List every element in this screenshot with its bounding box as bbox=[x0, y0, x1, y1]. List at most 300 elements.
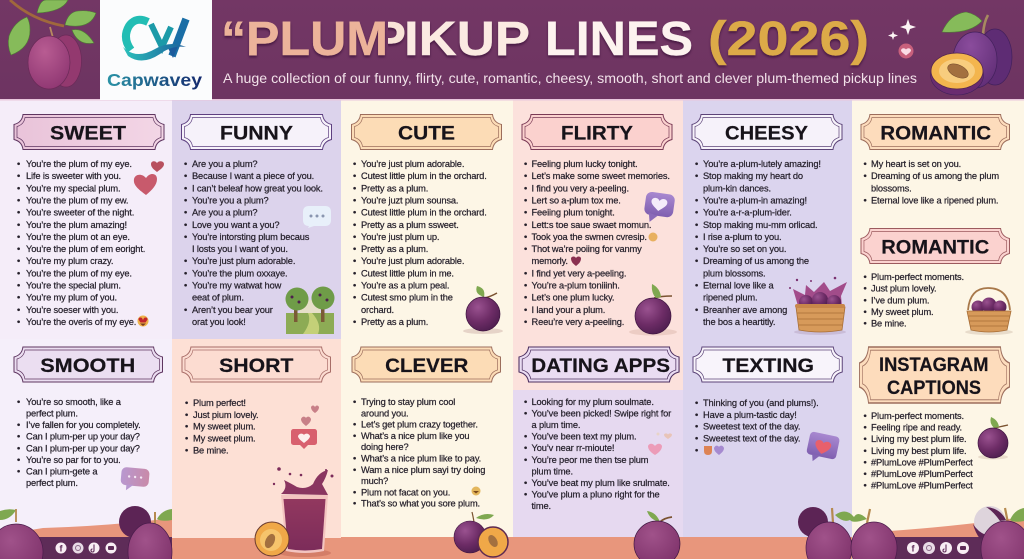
list: flirty lines: • bbox=[524, 268, 527, 278]
list: funny lines: orat you look! bbox=[192, 317, 246, 327]
list: texting lines: • bbox=[695, 422, 698, 432]
list: cheesy lines: I rise a-plum to you. bbox=[703, 232, 782, 242]
illustration: orchard trees bbox=[286, 286, 334, 334]
list: dating apps lines: You’ve been picked! Swipe right for bbox=[532, 409, 671, 419]
list: sweet lines: Life is sweeter with you. bbox=[26, 171, 121, 181]
list: sweet lines: • bbox=[17, 171, 20, 181]
list: funny lines: • bbox=[184, 305, 187, 315]
list: dating apps lines: You’v near rr-mioute! bbox=[532, 443, 614, 453]
heading: romantic second bbox=[861, 228, 1010, 264]
logo: capwavey bbox=[100, 0, 212, 100]
list: sweet lines: You’re the plum of my eye. bbox=[26, 268, 132, 278]
list: sweet lines: You’re my special plum. bbox=[26, 183, 120, 193]
list: cheesy lines: the bos a heartitly. bbox=[703, 317, 775, 327]
list: cute lines: • bbox=[353, 159, 356, 169]
list: romantic second lines: I’ve dum plum. bbox=[871, 295, 929, 305]
list: cheesy lines: • bbox=[695, 232, 698, 242]
list: flirty lines: Feeling plum lucky tonight. bbox=[532, 159, 638, 169]
list: short lines: Be mine. bbox=[193, 445, 228, 455]
heading: romantic second: ROMANTIC bbox=[881, 237, 990, 259]
list: flirty lines: • bbox=[524, 305, 527, 315]
list: funny lines: You’re the plum oxxaye. bbox=[192, 268, 287, 278]
list: flirty lines: • bbox=[524, 159, 527, 169]
heading: cheesy bbox=[692, 114, 842, 150]
list: smooth lines: • bbox=[17, 397, 20, 407]
list: smooth lines: • bbox=[17, 466, 20, 476]
list: flirty lines: • bbox=[524, 244, 527, 254]
illustration: plum with half bbox=[930, 12, 1012, 95]
list: sweet lines: You’re the special plum. bbox=[26, 280, 121, 290]
list: sweet lines: You’re my plum crazy. bbox=[26, 256, 113, 266]
heading: sweet: SWEET bbox=[50, 124, 126, 144]
list: funny lines: • bbox=[184, 256, 187, 266]
list: dating apps lines: plum time. bbox=[532, 466, 573, 476]
list: funny lines: You’re my watwat how bbox=[192, 280, 282, 290]
list: clever lines: • bbox=[353, 420, 356, 430]
list: sweet lines: • bbox=[17, 244, 20, 254]
list: smooth lines: • bbox=[17, 455, 20, 465]
panel: short bbox=[172, 339, 341, 559]
list: instagram captions lines: #PlumLove #PlumPerfect bbox=[871, 457, 973, 467]
icon: plum bbox=[978, 417, 1008, 460]
list: cute lines: • bbox=[353, 171, 356, 181]
illustration: plum basket bbox=[965, 288, 1013, 335]
list: funny lines: You’re intorsting plum becaus bbox=[192, 232, 310, 242]
heading: cheesy: CHEESY bbox=[725, 124, 808, 144]
list: dating apps lines: You’re peor me then tse plum bbox=[532, 455, 649, 465]
header band bbox=[0, 0, 1024, 100]
list: cheesy lines: • bbox=[695, 220, 698, 230]
icon: heart message bubble bbox=[805, 431, 840, 466]
title: “PLUM bbox=[221, 13, 388, 66]
list: short lines: • bbox=[185, 434, 188, 444]
list: smooth lines: Can I pium-gete a bbox=[26, 466, 98, 476]
list: clever lines: • bbox=[353, 465, 356, 475]
list: cute lines: Pretty as a plum. bbox=[361, 183, 428, 193]
list: cheesy lines: • bbox=[695, 208, 698, 218]
heading: cute: CUTE bbox=[398, 124, 455, 144]
list: funny lines: • bbox=[184, 220, 187, 230]
heading: instagram captions bbox=[860, 347, 1010, 403]
list: dating apps lines: • bbox=[524, 489, 527, 499]
list: cute lines: Cutest little plum in the orchard. bbox=[361, 171, 487, 181]
list: funny lines: You’re just plum adorable. bbox=[192, 256, 295, 266]
list: flirty lines: Lert so a-plum tox me. bbox=[532, 196, 621, 206]
list: cheesy lines: • bbox=[695, 196, 698, 206]
list: dating apps lines: time. bbox=[532, 501, 551, 511]
list: instagram captions lines: • bbox=[864, 469, 867, 479]
list: clever lines: Let’s get plum crazy together. bbox=[361, 420, 478, 430]
title: IKUP bbox=[404, 13, 530, 66]
list: sweet lines: • bbox=[17, 183, 20, 193]
list: clever lines: What’s a nice plum like to pay. bbox=[361, 454, 481, 464]
list: cheesy lines: You’re a-plum-in amazing! bbox=[703, 196, 807, 206]
list: cute lines: Cutest little plum in the orchard. bbox=[361, 208, 487, 218]
list: funny lines: You’re you a plum? bbox=[192, 196, 269, 206]
list: flirty lines: memorly. bbox=[532, 256, 568, 266]
panel: instagram captions bbox=[852, 339, 1024, 559]
list: cute lines: • bbox=[353, 196, 356, 206]
heading: texting: TEXTING bbox=[722, 356, 814, 377]
panel: smooth bbox=[0, 339, 172, 559]
list: cheesy lines: Dreaming of us among the bbox=[703, 256, 809, 266]
list: clever lines: Wam a nice plum sayi try doing bbox=[361, 465, 485, 475]
icon: plum bbox=[634, 511, 680, 559]
list: romantic second lines: • bbox=[864, 272, 867, 282]
list: funny lines: Are you a plum? bbox=[192, 208, 257, 218]
list: cheesy lines: plum-kin dances. bbox=[703, 183, 771, 193]
list: cute lines: • bbox=[353, 208, 356, 218]
list: dating apps lines: You’ve been text my plum. bbox=[532, 432, 636, 442]
list: instagram captions lines: Feeling ripe and ready. bbox=[871, 423, 962, 433]
logo mark: CW wave bbox=[123, 19, 186, 61]
list: cute lines: • bbox=[353, 183, 356, 193]
list: romantic second lines: • bbox=[864, 307, 867, 317]
list: cheesy lines: plum blossoms. bbox=[703, 268, 765, 278]
list: sweet lines: • bbox=[17, 196, 20, 206]
heading: funny: FUNNY bbox=[220, 124, 293, 144]
icon: chat bubble bbox=[303, 206, 331, 228]
list: flirty lines: I find you very a-peeling. bbox=[532, 183, 629, 193]
list: sweet lines: • bbox=[17, 159, 20, 169]
list: flirty lines: • bbox=[524, 196, 527, 206]
list: instagram captions lines: Living my best plum life. bbox=[871, 446, 966, 456]
list: flirty lines: • bbox=[524, 208, 527, 218]
list: sweet lines: You’re the plum of my eye. bbox=[26, 159, 132, 169]
icon: floating hearts bbox=[301, 406, 319, 426]
panel: romantic bbox=[852, 100, 1024, 339]
list: smooth lines: perfect plum. bbox=[26, 409, 78, 419]
list: sweet lines: • bbox=[17, 293, 20, 303]
list: flirty lines: You’re a-plum toniiinh. bbox=[532, 280, 620, 290]
list: sweet lines: You’re my plum of you. bbox=[26, 293, 117, 303]
list: clever lines: That’s so what you sore plum. bbox=[361, 499, 480, 509]
list: cheesy lines: You’re so set on you. bbox=[703, 244, 786, 254]
list: flirty lines: • bbox=[524, 183, 527, 193]
list: instagram captions lines: • bbox=[864, 411, 867, 421]
icon: badge and heart emoji bbox=[704, 446, 724, 455]
icon: small dark heart bbox=[571, 256, 581, 266]
list: sweet lines: You’re soeser with you. bbox=[26, 305, 118, 315]
list: funny lines: I can’t beleaf how great you look. bbox=[192, 183, 323, 193]
social icons right bbox=[907, 542, 969, 554]
heading: clever bbox=[352, 347, 500, 382]
list: sweet lines: • bbox=[17, 232, 20, 242]
list: cheesy lines: Breanher ave among bbox=[703, 305, 787, 315]
list: clever lines: doing here? bbox=[361, 442, 408, 452]
list: cute lines: You’re juzt plum sounsa. bbox=[361, 196, 458, 206]
list: romantic lines: blossoms. bbox=[871, 183, 912, 193]
list: smooth lines: You’re so par for to you. bbox=[26, 455, 121, 465]
list: sweet lines: • bbox=[17, 220, 20, 230]
icon: sparkles and heart bbox=[888, 19, 916, 58]
list: sweet lines: You’re sweeter of the night. bbox=[26, 208, 134, 218]
logo wordmark: Capwavey bbox=[107, 70, 202, 90]
heading: dating apps bbox=[519, 347, 679, 382]
list: funny lines: • bbox=[184, 232, 187, 242]
list: instagram captions lines: #PlumLove #PlumPerfect bbox=[871, 469, 973, 479]
list: cute lines: You’re just plum up. bbox=[361, 232, 439, 242]
illustration: whole and half plum bbox=[454, 512, 508, 557]
list: short lines: • bbox=[185, 398, 188, 408]
list: smooth lines: I’ve fallen for you completely. bbox=[26, 420, 141, 430]
list: flirty lines: Took yoa the swmen cvresip. bbox=[532, 232, 647, 242]
list: funny lines: Love you want a you? bbox=[192, 220, 279, 230]
list: romantic lines: • bbox=[864, 171, 867, 181]
list: cheesy lines: • bbox=[695, 280, 698, 290]
panel: clever bbox=[341, 339, 513, 559]
list: cute lines: Cutest smo plum in the bbox=[361, 293, 453, 303]
list: funny lines: • bbox=[184, 268, 187, 278]
list: instagram captions lines: Living my best plum life. bbox=[871, 434, 966, 444]
heading: smooth: SMOOTH bbox=[40, 356, 135, 377]
icon: heart-eyes emoji bbox=[138, 316, 148, 326]
list: cheesy lines: Eternal love like a bbox=[703, 280, 775, 290]
list: romantic second lines: • bbox=[864, 319, 867, 329]
icon: plum bbox=[463, 286, 503, 334]
list: smooth lines: • bbox=[17, 443, 20, 453]
heading: dating apps: DATING APPS bbox=[531, 356, 670, 377]
list: cheesy lines: • bbox=[695, 171, 698, 181]
list: sweet lines: You’re the plum of em eoright. bbox=[26, 244, 145, 254]
illustration: plum juice glass bbox=[273, 467, 334, 557]
list: funny lines: I losts you I want of you. bbox=[192, 244, 288, 254]
heading: texting bbox=[693, 347, 842, 382]
list: sweet lines: • bbox=[17, 280, 20, 290]
list: dating apps lines: a plum time. bbox=[532, 420, 580, 430]
list: dating apps lines: • bbox=[524, 455, 527, 465]
list: short lines: • bbox=[185, 422, 188, 432]
list: instagram captions lines: • bbox=[864, 481, 867, 491]
list: instagram captions lines: • bbox=[864, 457, 867, 467]
list: flirty lines: Let’s one plum lucky. bbox=[532, 293, 614, 303]
list: smooth lines: perfect plum. bbox=[26, 478, 78, 488]
list: texting lines: Sweetest text of the day. bbox=[703, 434, 800, 444]
heading: flirty: FLIRTY bbox=[561, 124, 633, 144]
title: P bbox=[372, 13, 406, 66]
list: clever lines: • bbox=[353, 454, 356, 464]
list: cute lines: • bbox=[353, 317, 356, 327]
list: clever lines: • bbox=[353, 499, 356, 509]
list: instagram captions lines: • bbox=[864, 423, 867, 433]
list: short lines: • bbox=[185, 445, 188, 455]
footer right: plums and social icons bbox=[798, 506, 1024, 559]
list: short lines: Plum perfect! bbox=[193, 398, 246, 408]
list: flirty lines: • bbox=[524, 232, 527, 242]
social icons right: f bbox=[912, 544, 916, 554]
list: cheesy lines: You’re a-plum-lutely amazing! bbox=[703, 159, 821, 169]
list: texting lines: • bbox=[695, 445, 698, 455]
list: short lines: My sweet plum. bbox=[193, 434, 255, 444]
list: texting lines: Sweetest text of the day. bbox=[703, 422, 800, 432]
list: sweet lines: You’re the overis of my eye. bbox=[26, 317, 136, 327]
title: (2026) bbox=[708, 13, 869, 66]
list: funny lines: • bbox=[184, 171, 187, 181]
list: flirty lines: I land your a plum. bbox=[532, 305, 605, 315]
panel: flirty bbox=[513, 100, 683, 339]
icon: message bubble bbox=[120, 467, 150, 492]
heading: funny bbox=[182, 114, 332, 150]
social icons left: f bbox=[60, 544, 64, 554]
list: cute lines: Pretty as a plum. bbox=[361, 244, 428, 254]
panel: funny bbox=[172, 100, 341, 339]
list: cheesy lines: ripened plum. bbox=[703, 293, 757, 303]
list: sweet lines: You’re the plum ot an eye. bbox=[26, 232, 130, 242]
list: dating apps lines: You’ve beat my plum like srulmate. bbox=[532, 478, 670, 488]
list: cheesy lines: You’re a-r-a-plum-ider. bbox=[703, 208, 792, 218]
heading: sweet bbox=[14, 114, 164, 150]
list: cheesy lines: Stop making mu-mm orlicad. bbox=[703, 220, 817, 230]
heading: instagram captions: INSTAGRAM bbox=[879, 355, 988, 376]
list: cute lines: Pretty as a plum. bbox=[361, 317, 428, 327]
list: funny lines: • bbox=[184, 196, 187, 206]
list: clever lines: Trying to stay plum cool bbox=[361, 397, 455, 407]
list: romantic second lines: Be mine. bbox=[871, 319, 906, 329]
list: cute lines: orchard. bbox=[361, 305, 394, 315]
list: smooth lines: You’re so smooth, like a bbox=[26, 397, 122, 407]
list: romantic lines: • bbox=[864, 159, 867, 169]
icon: laughing emoji bbox=[472, 486, 480, 496]
list: dating apps lines: • bbox=[524, 432, 527, 442]
list: funny lines: • bbox=[184, 183, 187, 193]
list: cute lines: • bbox=[353, 256, 356, 266]
list: instagram captions lines: #PlumLove #PlumPerfect bbox=[871, 481, 973, 491]
list: flirty lines: Let’s make some sweet memories. bbox=[532, 171, 670, 181]
list: sweet lines: You’re the plum of my ew. bbox=[26, 196, 128, 206]
list: smooth lines: Can I plum-per up your day? bbox=[26, 443, 140, 453]
list: romantic lines: My heart is set on you. bbox=[871, 159, 961, 169]
list: romantic lines: Dreaming of us among the plum bbox=[871, 171, 999, 181]
social icons left bbox=[56, 542, 116, 554]
list: romantic second lines: Just plum lovely. bbox=[871, 284, 936, 294]
list: clever lines: around you. bbox=[361, 408, 408, 418]
list: smooth lines: • bbox=[17, 432, 20, 442]
list: flirty lines: Feeiing plum tonight. bbox=[532, 208, 615, 218]
list: funny lines: Are you a plum? bbox=[192, 159, 257, 169]
subtitle: A huge collection of our funny, flirty, cute, romantic, cheesy, smooth, short and clever plum-themed pickup lines bbox=[223, 70, 917, 86]
heading: cute bbox=[352, 114, 502, 150]
list: romantic second lines: • bbox=[864, 295, 867, 305]
list: romantic second lines: • bbox=[864, 284, 867, 294]
list: cute lines: • bbox=[353, 280, 356, 290]
list: cheesy lines: • bbox=[695, 159, 698, 169]
list: cute lines: Cutest little plum in me. bbox=[361, 268, 454, 278]
list: funny lines: • bbox=[184, 159, 187, 169]
list: cute lines: • bbox=[353, 220, 356, 230]
list: sweet lines: • bbox=[17, 317, 20, 327]
list: clever lines: • bbox=[353, 431, 356, 441]
list: dating apps lines: You’ve plum a pluno right for the bbox=[532, 489, 660, 499]
list: instagram captions lines: Plum-perfect moments. bbox=[871, 411, 964, 421]
heading: romantic bbox=[861, 114, 1010, 150]
list: flirty lines: Lett:s toe saue swaet momun. bbox=[532, 220, 651, 230]
list: sweet lines: • bbox=[17, 208, 20, 218]
list: short lines: • bbox=[185, 410, 188, 420]
list: flirty lines: • bbox=[524, 171, 527, 181]
list: clever lines: much? bbox=[361, 476, 388, 486]
icon: blush emoji bbox=[648, 232, 658, 242]
list: flirty lines: Reeu’re very a-peeling. bbox=[532, 317, 624, 327]
list: instagram captions lines: • bbox=[864, 434, 867, 444]
panel: dating apps bbox=[513, 339, 683, 559]
list: cute lines: • bbox=[353, 268, 356, 278]
list: cheesy lines: Stop making my heart do bbox=[703, 171, 803, 181]
icon: purple heart bubble bbox=[643, 191, 676, 225]
icon: hearts bbox=[134, 161, 164, 195]
list: clever lines: What’s a nice plum like you bbox=[361, 431, 469, 441]
list: cute lines: You’re just plum adorable. bbox=[361, 256, 464, 266]
list: flirty lines: I find yet very a-peeling. bbox=[532, 268, 626, 278]
list: dating apps lines: • bbox=[524, 443, 527, 453]
list: flirty lines: • bbox=[524, 293, 527, 303]
list: clever lines: Plum not facat on you. bbox=[361, 487, 450, 497]
icon: pink hearts bbox=[648, 432, 672, 455]
list: romantic lines: Eternal love like a ripened plum. bbox=[871, 196, 998, 206]
list: instagram captions lines: • bbox=[864, 446, 867, 456]
list: sweet lines: You’re the plum amazing! bbox=[26, 220, 127, 230]
heading: clever: CLEVER bbox=[385, 356, 469, 377]
list: romantic second lines: Plum-perfect moments. bbox=[871, 272, 964, 282]
icon: plum bbox=[629, 284, 677, 336]
heading: flirty bbox=[522, 114, 672, 150]
title: LINES bbox=[545, 13, 693, 66]
list: cheesy lines: • bbox=[695, 244, 698, 254]
list: texting lines: Thinking of you (and plums!). bbox=[703, 398, 819, 408]
icon: like badge bbox=[291, 429, 317, 449]
list: funny lines: • bbox=[184, 280, 187, 290]
list: smooth lines: Can I plum-per up your day? bbox=[26, 432, 140, 442]
list: short lines: My sweet plum. bbox=[193, 422, 255, 432]
heading: instagram captions: CAPTIONS bbox=[887, 378, 981, 399]
list: dating apps lines: • bbox=[524, 478, 527, 488]
list: cute lines: • bbox=[353, 244, 356, 254]
list: texting lines: • bbox=[695, 398, 698, 408]
list: flirty lines: • bbox=[524, 220, 527, 230]
list: cute lines: Pretty as a plum ssweet. bbox=[361, 220, 459, 230]
list: romantic lines: • bbox=[864, 196, 867, 206]
illustration: half plum bbox=[255, 522, 289, 556]
list: sweet lines: • bbox=[17, 268, 20, 278]
list: flirty lines: • bbox=[524, 280, 527, 290]
heading: smooth bbox=[14, 347, 162, 382]
list: smooth lines: • bbox=[17, 420, 20, 430]
list: texting lines: Have a plum-tastic day! bbox=[703, 410, 797, 420]
list: dating apps lines: Looking for my plum soulmate. bbox=[532, 397, 654, 407]
illustration: splashing plum basket bbox=[789, 277, 847, 335]
title bbox=[221, 13, 869, 66]
heading: romantic: ROMANTIC bbox=[880, 123, 992, 145]
list: dating apps lines: • bbox=[524, 409, 527, 419]
list: flirty lines: Thot wa’re poiing for vanmy bbox=[532, 244, 642, 254]
list: funny lines: Aren’t you bear your bbox=[192, 305, 273, 315]
list: flirty lines: • bbox=[524, 317, 527, 327]
list: clever lines: • bbox=[353, 397, 356, 407]
list: cute lines: • bbox=[353, 293, 356, 303]
panel: texting bbox=[683, 339, 852, 559]
list: clever lines: • bbox=[353, 487, 356, 497]
list: cute lines: You’re just plum adorable. bbox=[361, 159, 464, 169]
list: cheesy lines: • bbox=[695, 305, 698, 315]
list: dating apps lines: • bbox=[524, 397, 527, 407]
list: texting lines: • bbox=[695, 434, 698, 444]
list: romantic second lines: My sweet plum. bbox=[871, 307, 933, 317]
illustration: plum on branch bbox=[8, 0, 96, 89]
footer left: plums and social icons bbox=[0, 506, 172, 559]
list: cute lines: • bbox=[353, 232, 356, 242]
list: texting lines: • bbox=[695, 410, 698, 420]
heading: short: SHORT bbox=[219, 356, 294, 377]
panel: sweet bbox=[0, 100, 172, 339]
